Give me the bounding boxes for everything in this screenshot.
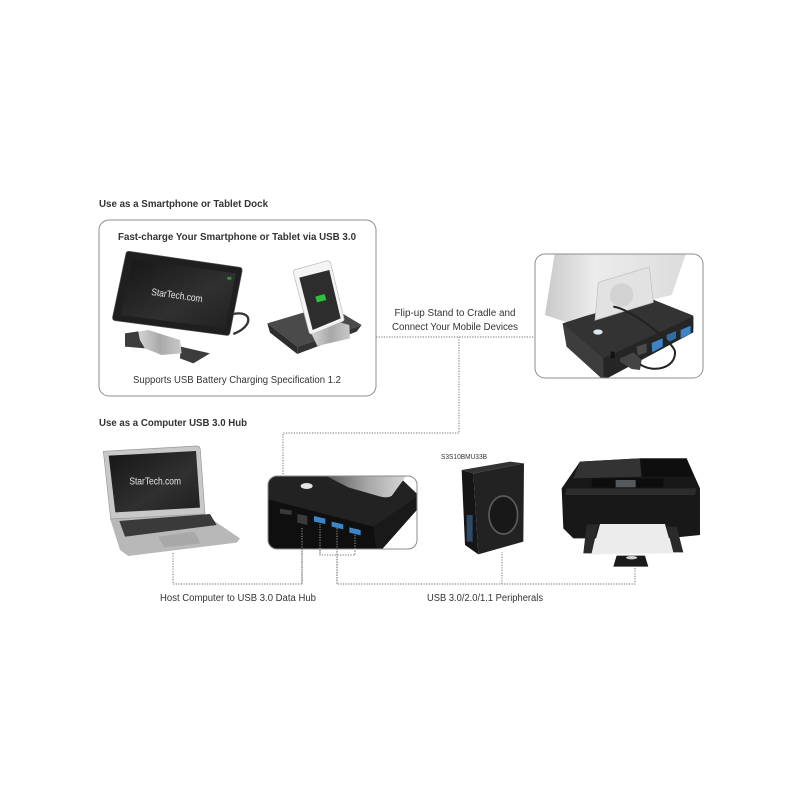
tablet on stand: StarTech.com [151,287,203,305]
panel: stand close-up [535,252,703,380]
small dotted port lines [302,524,355,584]
heading: computer hub: Use as a Computer USB 3.0 Hub [99,418,247,429]
panel: dock [99,220,376,396]
label: peripherals: USB 3.0/2.0/1.1 Peripherals [427,593,543,604]
label: host computer: Host Computer to USB 3.0 Data Hub [160,593,316,604]
hub and flipped stand [545,252,693,380]
phone on dock [267,261,362,354]
printer [562,458,700,567]
hub body with ports [268,475,418,552]
panel: hub close-up [268,475,418,552]
laptop: StarTech.com [129,477,181,488]
flip-up stand label: Flip-up Stand to Cradle and [394,308,516,319]
panel heading: Fast-charge Your Smartphone or Tablet via USB 3.0 [118,232,356,243]
laptop [103,446,240,556]
dotted connector lines [173,337,635,584]
tablet on stand [113,251,248,363]
external drive [462,462,524,554]
product code label: S3S10BMU33B [441,454,487,461]
panel note: Supports USB Battery Charging Specification 1.2 [133,375,341,386]
flip-up stand label line 2: Connect Your Mobile Devices [392,322,518,333]
heading: smartphone or tablet dock: Use as a Smartphone or Tablet Dock [99,199,268,210]
